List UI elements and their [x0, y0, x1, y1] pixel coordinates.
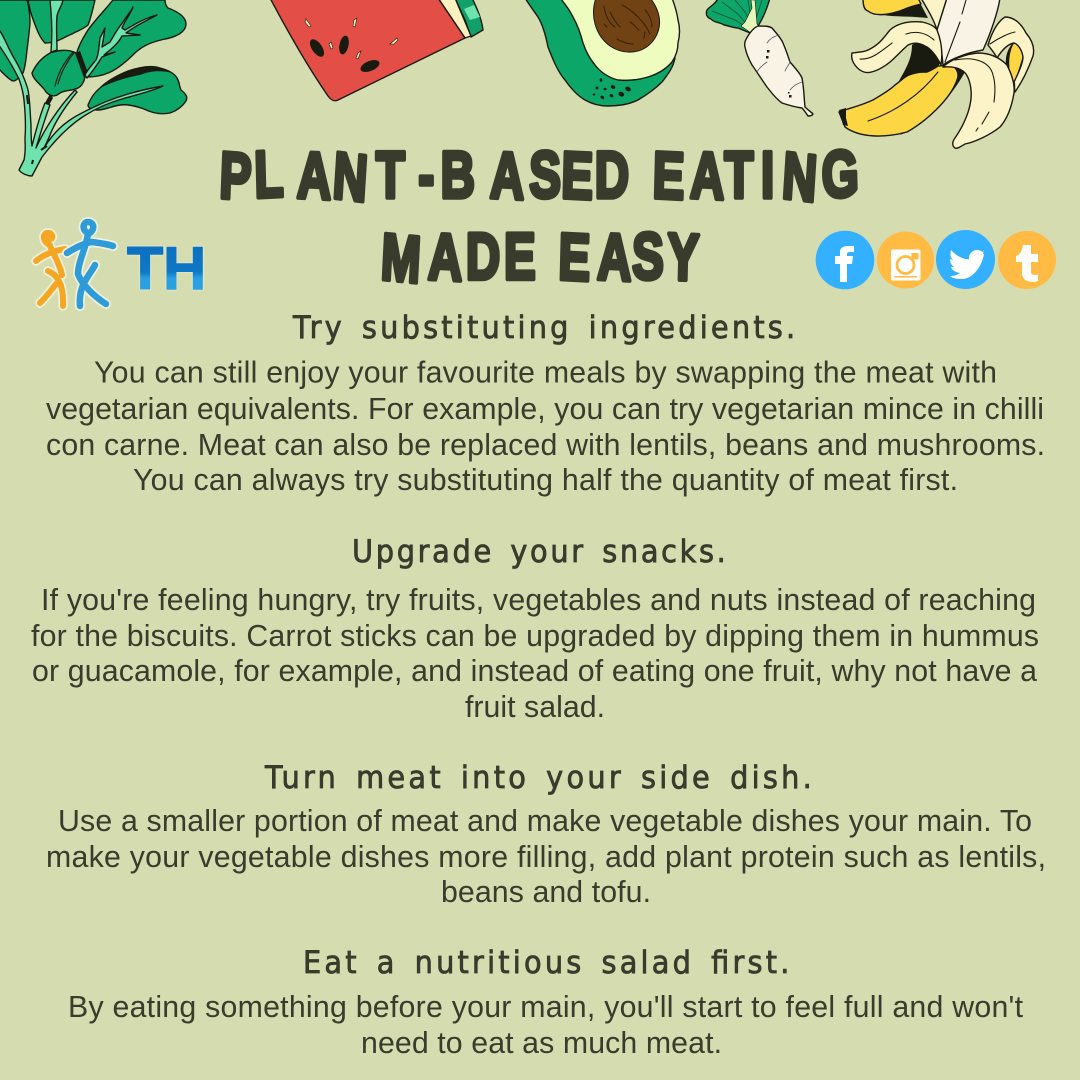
icon: spinach	[0, 0, 187, 176]
logo: TH: TH	[127, 235, 206, 302]
body text: vegetarian equivalents. For example, you can try vegetarian mince in chilli	[46, 393, 1044, 426]
icon: avocado	[525, 0, 680, 106]
body text: make your vegetable dishes more filling, add plant protein such as lentils,	[46, 841, 1046, 874]
icon: radish	[706, 0, 813, 116]
heading: Upgrade your snacks.	[352, 534, 726, 570]
title	[218, 137, 860, 298]
body text: If you're feeling hungry, try fruits, vegetables and nuts instead of reaching	[41, 584, 1036, 617]
body text	[46, 356, 1045, 497]
icon: watermelon	[270, 0, 483, 101]
heading: Eat a nutritious salad first.	[303, 945, 789, 981]
body text	[46, 805, 1046, 909]
title: PLANT-BASED EATING	[218, 137, 860, 217]
section: substituting ingredients	[46, 310, 1045, 497]
icon: twitter	[936, 230, 995, 289]
body text: You can still enjoy your favourite meals by swapping the meat with	[94, 356, 997, 390]
social icons	[816, 230, 1056, 289]
heading: Try substituting ingredients.	[292, 310, 795, 346]
body text: beans and tofu.	[441, 876, 651, 909]
icon: tumblr	[998, 231, 1056, 289]
icon: banana	[839, 0, 1034, 148]
section: eat a nutritious salad first	[68, 945, 1024, 1060]
title: MADE EASY	[379, 220, 700, 298]
heading: Turn meat into your side dish.	[264, 760, 812, 796]
body text	[31, 584, 1039, 724]
section: upgrade your snacks	[31, 534, 1039, 724]
body text: need to eat as much meat.	[361, 1027, 722, 1060]
body text: con carne. Meat can also be replaced with lentils, beans and mushrooms.	[46, 429, 1045, 462]
body text: Use a smaller portion of meat and make vegetable dishes your main. To	[58, 805, 1032, 838]
icon: facebook	[816, 231, 874, 289]
body text: for the biscuits. Carrot sticks can be upgraded by dipping them in hummus	[31, 620, 1039, 653]
section: turn meat into your side dish	[46, 760, 1046, 909]
logo: TH	[36, 222, 206, 306]
body text: You can always try substituting half the quantity of meat first.	[133, 464, 958, 497]
body text: or guacamole, for example, and instead of eating one fruit, why not have a	[32, 655, 1037, 688]
icon: instagram	[877, 232, 934, 288]
body text: By eating something before your main, you'll start to feel full and won't	[68, 991, 1024, 1024]
body text: fruit salad.	[465, 691, 605, 724]
body text	[68, 991, 1024, 1060]
